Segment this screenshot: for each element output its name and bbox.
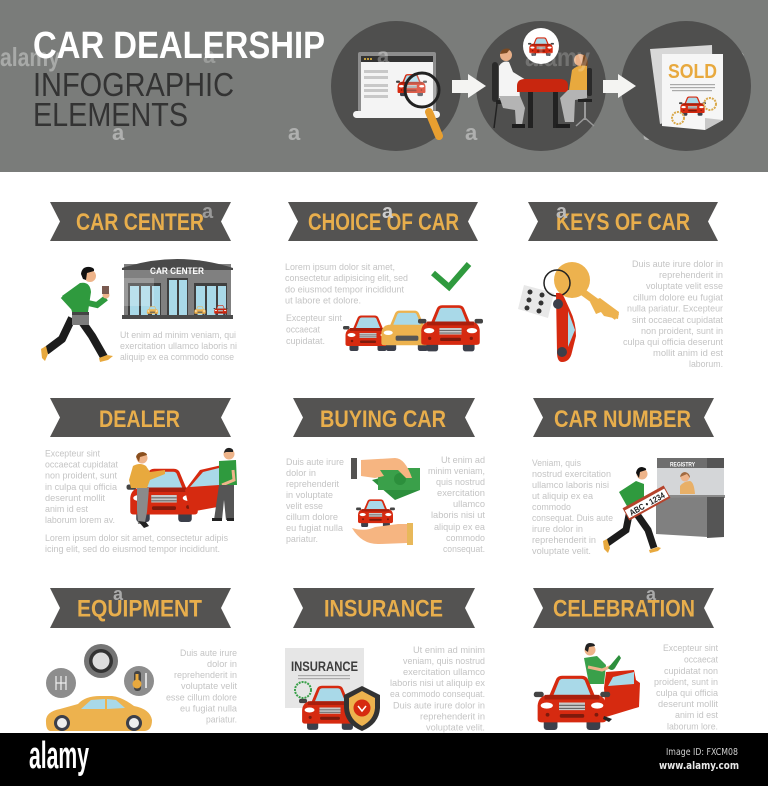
text block: proident, sunt in — [654, 677, 718, 688]
banner: celebration: CELEBRATION — [553, 596, 695, 622]
banner: choice of car — [288, 201, 478, 241]
icon: yellow sedan — [46, 696, 152, 731]
icon: automatic gear shift — [124, 666, 154, 696]
watermarks over circles: a — [377, 43, 390, 68]
banner: equipment: EQUIPMENT — [77, 596, 202, 622]
banner: buying car — [293, 398, 475, 437]
text block: voluptate velit — [181, 681, 237, 692]
icon: dealer and customer with red car — [126, 448, 237, 528]
header watermarks: a — [288, 120, 301, 145]
title: ELEMENTS — [33, 96, 188, 133]
header watermarks: a — [112, 120, 125, 145]
text block: Excepteur sint — [663, 643, 718, 654]
icon: hands exchanging cash and car — [351, 458, 420, 545]
header watermarks: alamy — [0, 42, 60, 72]
arrow — [603, 74, 636, 98]
banner: car center — [50, 201, 231, 241]
banner: insurance: INSURANCE — [324, 596, 443, 622]
text block: laboris nisi ut aliquip ex — [390, 678, 485, 689]
text block — [285, 262, 408, 347]
title — [33, 25, 325, 133]
text block: Ut enim ad minim veniam, qui — [120, 330, 236, 341]
text block: Lorem ipsum dolor sit amet, consectetur adipis — [45, 533, 228, 544]
text block: voluptate velit esse — [646, 281, 723, 292]
banner: choice of car: a — [382, 201, 394, 223]
text block: minim veniam, — [428, 466, 485, 477]
banner: celebration — [533, 584, 714, 628]
banner: choice of car: CHOICE OF CAR — [308, 209, 459, 236]
text block: in voluptate — [286, 490, 333, 501]
circle: online search — [331, 21, 461, 151]
banner: celebration: a — [646, 584, 657, 604]
icon: car center building — [122, 259, 233, 319]
text block: reprehenderit — [286, 479, 339, 490]
panel: keys of car — [518, 201, 723, 370]
text block: quis nostrud — [436, 477, 485, 488]
text block: laborum lore. — [667, 722, 718, 732]
text block: cillum dolore — [286, 512, 338, 523]
title: CAR DEALERSHIP — [33, 25, 325, 67]
panel: celebration — [533, 584, 719, 732]
icon: car keys with dice and red car — [518, 262, 619, 362]
text block: culpa qui officia deserunt — [623, 337, 723, 348]
text block — [390, 645, 485, 734]
sold stamp: SOLD — [668, 61, 717, 83]
panel: buying car — [286, 398, 486, 555]
text block: eu fugiat nulla — [180, 704, 238, 714]
text block — [428, 455, 486, 555]
banner: equipment — [50, 584, 231, 628]
text block: ut labore et dolore. — [285, 296, 361, 306]
circle: consultation at table — [476, 21, 606, 151]
text block: pariatur. — [206, 714, 237, 726]
panel: dealer — [45, 398, 237, 555]
text block: esse cillum dolore — [166, 692, 237, 704]
panel: insurance — [285, 588, 485, 734]
banner: car center: a — [202, 201, 214, 223]
text block: laborum lorem av. — [45, 515, 115, 526]
watermarks over circles: alamy — [525, 42, 590, 72]
text block: aliquip ex ea commodo conse — [120, 352, 234, 363]
icon: manual gear shift — [46, 668, 76, 698]
text block: Duis aute irure — [180, 648, 237, 659]
banner: keys of car: a — [556, 201, 568, 223]
text block: reprehenderit in — [659, 270, 723, 281]
text block: Duis aute irure dolor in — [632, 259, 723, 270]
header watermarks: a — [733, 44, 746, 69]
text block: pariatur. — [286, 534, 318, 545]
watermarks over circles — [377, 42, 590, 72]
text block: dolor in — [286, 468, 316, 479]
text block: Excepteur sint — [286, 313, 342, 324]
text block: velit esse — [286, 501, 323, 512]
text block: deserunt mollit — [45, 493, 105, 504]
footer bar — [0, 733, 768, 786]
circle: sold document — [621, 21, 751, 151]
text block: consequat. Duis aute — [532, 513, 613, 524]
panel: car number — [532, 398, 725, 557]
text block: laborum. — [689, 359, 723, 370]
text block — [166, 648, 238, 726]
text block: ut aliquip ex ea — [532, 491, 594, 502]
text block — [286, 457, 344, 545]
icon: running man with briefcase — [41, 267, 113, 362]
banner: keys of car: KEYS OF CAR — [556, 209, 690, 236]
text block: sint occaecat cupidatat — [632, 315, 723, 326]
licence plate: ABC • 1234 — [628, 490, 667, 518]
text block: exercitation ullamco laboris ni — [120, 341, 237, 352]
banner: car center: CAR CENTER — [76, 209, 204, 236]
text block: voluptate velit. — [426, 722, 485, 734]
panel: choice of car — [285, 201, 483, 351]
header watermarks: a — [465, 120, 478, 145]
text block — [45, 448, 228, 555]
text block: consectetur adipisicing elit, sed — [285, 273, 408, 284]
text block: Lorem ipsum dolor sit amet, — [285, 262, 395, 273]
text block: ullamco — [453, 499, 485, 510]
text block: ea commodo consequat. — [390, 689, 485, 700]
text block: reprehenderit in — [420, 712, 485, 722]
text block: do eiusmod tempor incididunt — [285, 284, 404, 296]
text block — [654, 643, 719, 732]
icon: car center building: CAR CENTER — [150, 266, 204, 277]
text block: exercitation ullamco — [403, 667, 485, 678]
banner: buying car: BUYING CAR — [320, 406, 446, 433]
text block: veniam, quis nostrud — [403, 656, 485, 667]
text block: cupidatat. — [286, 336, 325, 347]
text block — [532, 458, 613, 557]
text block: commodo — [532, 502, 571, 513]
text block: nostrud exercitation — [532, 469, 611, 480]
text block: culpa qui officia — [656, 688, 719, 699]
icon: man with champagne and red car — [534, 643, 640, 730]
icon: registry booth — [656, 458, 725, 538]
icon: registry booth: REGISTRY — [670, 462, 695, 468]
icon: insurance document, car and shield — [285, 648, 380, 731]
text block: Duis aute irure — [286, 457, 344, 468]
text block — [120, 330, 237, 363]
icon: insurance document, car and shield: INSURANCE — [291, 659, 358, 674]
text block: aliquip ex ea — [434, 522, 486, 533]
text block: Ut enim ad minim — [413, 645, 485, 656]
text block: occaecat cupidatat — [45, 460, 118, 470]
header band — [0, 0, 768, 172]
text block: nulla pariatur. Excepteur — [627, 304, 723, 314]
text block: non proident, sunt — [45, 470, 117, 482]
text block: exercitation — [437, 488, 485, 499]
banner: keys of car — [528, 201, 718, 241]
text block: laboris nisi ut — [431, 510, 485, 521]
panel: car center — [41, 201, 237, 363]
text block: deserunt mollit — [658, 699, 718, 710]
text block: dolor in — [207, 659, 237, 670]
text block: anim id est — [45, 504, 88, 515]
text block: reprehenderit in — [174, 670, 237, 681]
banner: car number: CAR NUMBER — [554, 406, 691, 433]
website: www.alamy.com — [659, 760, 739, 772]
text block: non proident, sunt in — [641, 326, 723, 337]
banner: dealer — [50, 398, 231, 437]
icon: wheel — [84, 644, 118, 678]
text block: commodo — [446, 533, 485, 544]
text block: reprehenderit in — [532, 535, 596, 546]
panel: equipment — [46, 584, 238, 731]
text block: consequat. — [443, 544, 485, 555]
text block: mollit anim id est — [653, 348, 723, 359]
footer logo: alamy — [29, 735, 89, 777]
text block: eu fugiat nulla — [286, 523, 344, 534]
text block: in culpa qui officia — [45, 482, 118, 493]
arrow — [452, 74, 486, 98]
banner: car number — [533, 398, 714, 437]
text block: cupidatat non — [664, 666, 718, 677]
header watermarks: a — [203, 43, 216, 68]
header watermarks: a — [643, 120, 656, 145]
text block: occaecat — [286, 324, 320, 336]
text block: anim id est — [675, 710, 718, 721]
title: INFOGRAPHIC — [33, 66, 234, 103]
banner: dealer: DEALER — [99, 406, 180, 433]
text block: ullamco laboris nisi — [532, 480, 609, 491]
banner: insurance — [293, 588, 475, 628]
text block: Excepteur sint — [45, 448, 100, 460]
text block: icing elit, sed do eiusmod tempor incididunt. — [45, 544, 220, 555]
text block: Duis aute irure dolor in — [393, 700, 485, 712]
banner: equipment: a — [113, 584, 124, 604]
text block: Veniam, quis — [532, 458, 581, 469]
text block — [623, 259, 723, 370]
icon: green check mark — [433, 264, 469, 287]
text block: Ut enim ad — [441, 455, 485, 466]
header watermarks — [0, 42, 746, 145]
text block: voluptate velit. — [532, 546, 591, 557]
text block: cillum dolore eu fugiat — [633, 292, 723, 304]
text block: irure dolor in — [532, 524, 583, 535]
speech bubble — [523, 28, 559, 64]
image id: Image ID: FXCM08 — [666, 747, 738, 758]
text block: occaecat — [684, 654, 718, 666]
icon: three cars — [343, 305, 483, 351]
icon: man running with licence plate — [603, 467, 670, 553]
